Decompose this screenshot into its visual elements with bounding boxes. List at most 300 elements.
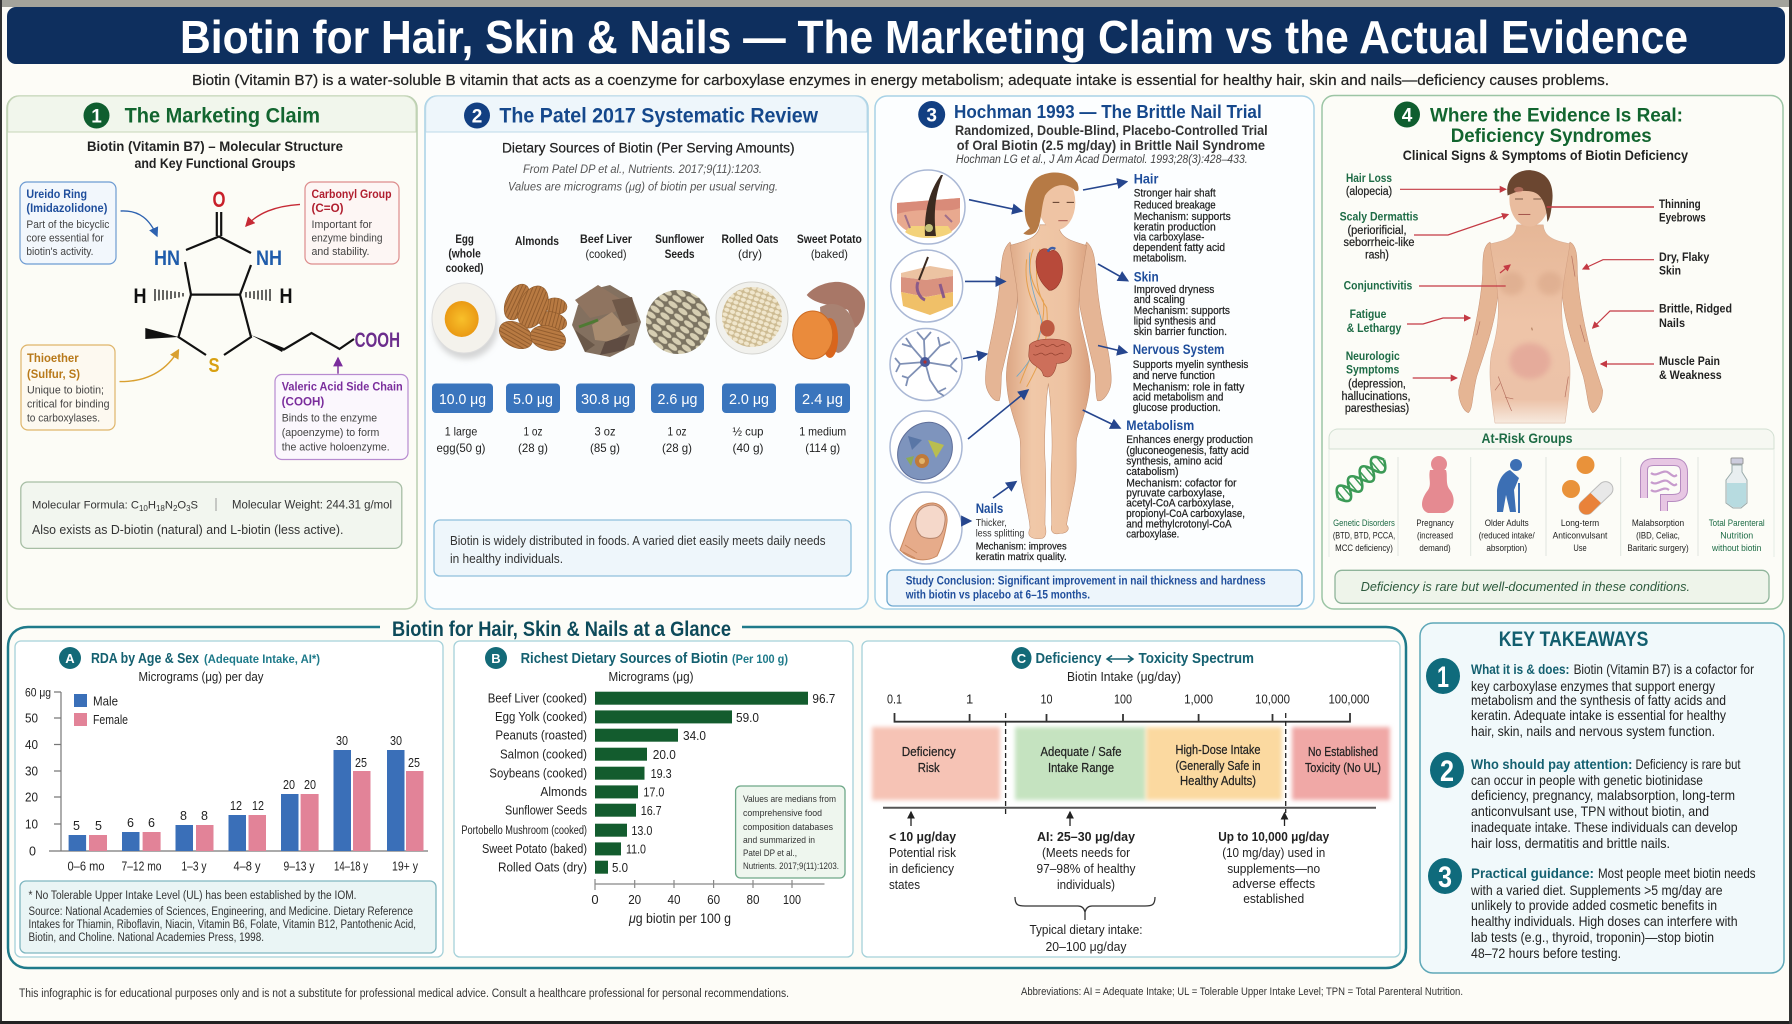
heading: panel A: RDA by Age & Sex: [91, 650, 200, 667]
molecule heading: Biotin (Vitamin B7) – Molecular Structure: [87, 138, 343, 154]
takeaway 1: hair, skin, nails and nervous system function.: [1471, 723, 1715, 739]
molecule: biotin structure: H: [280, 285, 292, 308]
bar chart: RDA by age and sex: 0: [29, 844, 36, 858]
at-risk: total parenteral nutrition bottle: Total Parenteral: [1709, 518, 1765, 528]
bar chart: foods per 100 g: 96.7: [812, 691, 835, 706]
label: adequate intake: (Meets needs for: [1042, 845, 1131, 860]
food column: egg: 10.0 μg: [439, 391, 486, 408]
formula box: S: [191, 500, 198, 512]
study conclusion box: [887, 570, 1302, 606]
study conclusion box: Study Conclusion: Significant improvement in nail thickness and hardness: [906, 576, 1266, 588]
callout: ureido ring: (Imidazolidone): [26, 203, 108, 215]
formula box: 3: [186, 504, 191, 513]
bar chart: RDA by age and sex: 7–12 mo: [122, 860, 162, 874]
food column: sweet potato: (baked): [811, 247, 848, 261]
callout: carbonyl group: Important for: [312, 219, 372, 231]
bar chart: RDA by age and sex: 30: [390, 734, 402, 748]
takeaway 3: Most people meet biotin needs: [1598, 865, 1756, 881]
callouts: left symptom labels: (depression,: [1348, 378, 1406, 390]
text: hair effects: [1133, 170, 1231, 264]
callout: ureido ring: biotin's activity.: [26, 246, 93, 258]
callouts: left symptom labels: [1340, 171, 1419, 415]
at-risk: pregnancy: demand): [1419, 543, 1451, 553]
bar chart: foods per 100 g: 0: [591, 892, 599, 907]
arrow: valeric to chain: [337, 358, 339, 374]
at-risk groups panel: At-Risk Groups: [1482, 431, 1572, 446]
heading: panel 4: Where the Evidence Is Real:: [1430, 104, 1683, 126]
molecule: biotin structure: [134, 187, 400, 377]
label: upper dose: supplements—no: [1227, 861, 1320, 876]
heading: panel C: Deficiency: [1036, 650, 1102, 667]
heading: panel 3: Hochman LG et al., J Am Acad Dermatol. 1993;28(3):428–433.: [956, 154, 1248, 166]
text: metabolism effects: and methylcrotonyl-CoA: [1126, 518, 1232, 530]
text: nails effects: Thicker,: [976, 517, 1007, 529]
formula box: [21, 482, 402, 548]
heading: key takeaways: KEY TAKEAWAYS: [1499, 628, 1648, 651]
takeaway 1: 1: [1437, 661, 1449, 694]
text: metabolism effects: Metabolism: [1126, 418, 1194, 433]
bar chart: foods per 100 g: 40: [668, 892, 680, 907]
panel 2: The Patel 2017 Systematic Review: [425, 96, 868, 609]
text: hair effects: dependent fatty acid: [1133, 242, 1225, 254]
food column: rolled oats: [716, 232, 788, 455]
food column: rolled oats: ½ cup: [732, 424, 764, 438]
label: adequate intake: [1036, 829, 1136, 892]
takeaway 3: Practical guidance:: [1471, 865, 1594, 881]
inset: neuron: [890, 328, 962, 400]
bar chart: foods per 100 g: 20: [628, 892, 641, 907]
callouts: left symptom labels: Conjunctivitis: [1344, 278, 1413, 292]
spectrum band: no toxicity: [1292, 727, 1390, 800]
food column: egg: egg(50 g): [436, 441, 486, 455]
note box: biotin distribution: [434, 520, 851, 576]
spectrum band: high dose: Healthy Adults): [1180, 774, 1256, 788]
leader lines: symptoms to body: [1400, 189, 1654, 378]
footnote box: Biotin, and Choline. National Academies Press, 1998.: [28, 932, 264, 944]
callout: valeric acid side chain: the active holoenzyme.: [282, 442, 390, 454]
food column: sweet potato: [793, 232, 865, 455]
molecule: biotin structure: S: [208, 355, 220, 377]
heading: panel 3: Hochman 1993 — The Brittle Nail Trial: [954, 102, 1262, 122]
bar chart: RDA by age and sex: 14–18 y: [334, 860, 369, 874]
food column: egg: Egg: [455, 232, 474, 246]
bar chart: RDA by age and sex: 6: [127, 816, 134, 830]
text: metabolism effects: [1126, 418, 1253, 541]
arrow: thioether to ring: [120, 350, 178, 382]
callouts: left symptom labels: rash): [1365, 250, 1389, 262]
note box: biotin distribution: in healthy individuals.: [450, 552, 563, 566]
takeaway 2: anticonvulsant use, TPN without biotin, and: [1471, 803, 1709, 819]
callouts: left symptom labels: Hair Loss: [1346, 171, 1392, 185]
callout: thioether: (Sulfur, S): [27, 369, 80, 381]
label: upper dose: Up to 10,000 μg/day: [1218, 829, 1330, 844]
label: upper dose: established: [1243, 891, 1304, 906]
spectrum scale: 1,000: [1184, 692, 1213, 706]
bar chart: RDA by age and sex: 6: [148, 816, 155, 830]
takeaway 1: key carboxylase enzymes that support energy: [1471, 678, 1715, 694]
molecule: biotin structure: H: [134, 285, 146, 308]
bar chart: RDA by age and sex: 19+ y: [392, 860, 419, 874]
takeaway 1: keratin. Adequate intake is essential for healthy: [1471, 707, 1726, 723]
callout: ureido ring: Ureido Ring: [26, 189, 87, 201]
note box: biotin distribution: Biotin is widely distributed in foods. A varied diet easily meets daily needs: [450, 534, 826, 548]
bar chart: foods per 100 g: 11.0: [626, 842, 646, 856]
spectrum scale: 0.1: [887, 692, 902, 706]
food column: sweet potato: 2.4 μg: [802, 391, 843, 408]
callouts: right symptom labels: Brittle, Ridged: [1659, 302, 1732, 316]
bar chart: foods per 100 g: 59.0: [736, 710, 759, 725]
callouts: right symptom labels: Nails: [1659, 316, 1685, 330]
section frame: at a glance: Biotin for Hair, Skin & Nails at a Glance: [392, 618, 731, 641]
spectrum scale: [887, 692, 1370, 722]
text: nails effects: Nails: [976, 501, 1003, 516]
takeaway 3: lab tests (e.g., thyroid, troponin)—stop biotin: [1471, 929, 1714, 945]
footnote box: [20, 881, 436, 953]
molecule: biotin structure: O: [212, 187, 226, 212]
title banner: Biotin for Hair, Skin & Nails — The Marketing Claim vs the Actual Evidence: [180, 11, 1688, 63]
bar chart: foods per 100 g: Egg Yolk (cooked): [495, 709, 587, 724]
study conclusion box: with biotin vs placebo at 6–15 months.: [905, 589, 1090, 601]
text: skin effects: and scaling: [1134, 294, 1185, 306]
note box: medians: Values are medians from: [743, 794, 836, 805]
molecule heading: [87, 138, 343, 171]
takeaway 2: 2: [1440, 755, 1454, 788]
label: adequate intake: individuals): [1057, 877, 1115, 892]
axis subtitle: Micrograms (μg): [608, 669, 694, 684]
food column: beef liver: [572, 232, 641, 455]
food column: beef liver: 30.8 μg: [581, 391, 630, 408]
spectrum band: deficiency risk: Deficiency: [902, 745, 956, 759]
note box: medians: Nutrients. 2017;9(11):1203.: [743, 861, 839, 871]
food chart heading: [502, 141, 795, 194]
bar chart: RDA by age and sex: 1–3 y: [182, 860, 207, 874]
label: adequate intake: 97–98% of healthy: [1036, 861, 1136, 876]
food column: sunflower seeds: [646, 232, 710, 455]
spectrum dividers and arrows: [883, 713, 1376, 826]
bar chart: RDA by age and sex: 9–13 y: [284, 860, 315, 874]
callout: thioether: critical for binding: [27, 398, 110, 410]
callout: valeric acid side chain: Binds to the enzyme: [282, 412, 377, 424]
bar chart: RDA by age and sex: 25: [355, 756, 367, 770]
bar chart: RDA by age and sex: 8: [201, 809, 208, 823]
heading: panel 4: Deficiency Syndromes: [1451, 125, 1652, 147]
text: hair effects: keratin production: [1134, 221, 1216, 233]
takeaway 3: 3: [1438, 861, 1452, 894]
heading: panel 3: of Oral Biotin (2.5 mg/day) in Brittle Nail Syndrome: [957, 138, 1265, 153]
takeaway 1: [1426, 658, 1754, 739]
at-risk: malabsorption intestine: [1627, 462, 1689, 553]
note box: medians: composition databases: [743, 822, 833, 833]
bar chart: foods per 100 g: 20.0: [653, 747, 676, 762]
footer: disclaimer: This infographic is for educational purposes only and is not a substitute for professional medical advice. Consult a healthcare professional for personal recommendations.: [19, 988, 789, 1000]
at-risk: genetic disorders: Genetic Disorders: [1333, 518, 1395, 528]
text: nails effects: [976, 501, 1067, 563]
arrows: insets and callouts to body: [963, 182, 1128, 521]
callout: carbonyl group: (C=O): [312, 203, 344, 215]
at-risk: total parenteral nutrition bottle: Nutrition: [1720, 531, 1753, 541]
bar chart: RDA by age and sex: 25: [408, 756, 420, 770]
text: metabolism effects: Enhances energy production: [1126, 434, 1253, 446]
bar chart: RDA by age and sex: 5: [95, 819, 102, 833]
spectrum scale: 100: [1114, 692, 1132, 706]
note box: deficiency rare: Deficiency is rare but well-documented in these conditions.: [1361, 579, 1690, 594]
callout: ureido ring: Part of the bicyclic: [26, 219, 110, 231]
formula box: Molecular Weight: 244.31 g/mol: [232, 498, 392, 512]
molecule: biotin structure: NH: [256, 247, 282, 270]
bar chart: foods per 100 g: 34.0: [683, 728, 706, 743]
food column: rolled oats: (dry): [738, 247, 762, 261]
takeaway 2: inadequate intake. These individuals can develop: [1471, 819, 1738, 835]
callouts: left symptom labels: Symptoms: [1346, 363, 1400, 377]
takeaway 2: Who should pay attention:: [1471, 756, 1632, 772]
subtitle: Biotin (Vitamin B7) is a water-soluble B vitamin that acts as a coenzyme for carboxylase enzymes in energy metabolism; adequate intake is essential for healthy hair, skin and nails—deficiency causes problems.: [192, 72, 1609, 89]
text: metabolism effects: pyruvate carboxylase,: [1126, 488, 1225, 500]
heading: panel 4: Clinical Signs & Symptoms of Biotin Deficiency: [1403, 148, 1688, 163]
callout: ureido ring: core essential for: [26, 232, 104, 244]
bar chart: foods per 100 g: Salmon (cooked): [500, 746, 587, 762]
callout: thioether: Thioether: [27, 353, 79, 365]
label: deficiency threshold: [889, 829, 957, 892]
food column: sunflower seeds: Seeds: [665, 247, 695, 261]
axis subtitle: Biotin Intake (μg/day): [1067, 669, 1181, 684]
at-risk: older adults: absorption): [1486, 543, 1527, 553]
at-risk: anticonvulsant pills: Anticonvulsant: [1553, 531, 1608, 541]
bar chart: foods per 100 g: Peanuts (roasted): [495, 728, 587, 742]
text: skin effects: lipid synthesis and: [1134, 316, 1216, 328]
food column: rolled oats: Rolled Oats: [722, 232, 779, 246]
bar chart: foods per 100 g: μg biotin per 100 g: [628, 911, 731, 926]
takeaway 2: [1430, 752, 1741, 851]
bar chart: foods per 100 g: 13.0: [631, 823, 652, 838]
text: metabolism effects: carboxylase.: [1126, 529, 1179, 541]
callout: carbonyl group: Carbonyl Group: [312, 189, 392, 201]
text: nails effects: less splitting: [976, 528, 1025, 540]
text: skin effects: [1134, 269, 1230, 338]
callouts: right symptom labels: Eyebrows: [1659, 211, 1706, 225]
takeaway 1: Biotin (Vitamin B7) is a cofactor for: [1574, 661, 1754, 677]
bar chart: RDA by age and sex: 60 μg: [25, 686, 51, 700]
footnote box: * No Tolerable Upper Intake Level (UL) has been established by the IOM.: [28, 890, 356, 902]
bar chart: foods per 100 g: 16.7: [641, 803, 662, 818]
text: hair effects: Hair: [1134, 170, 1159, 186]
heading: panel A: [59, 647, 320, 669]
text: skin effects: Skin: [1134, 269, 1159, 285]
molecule heading: and Key Functional Groups: [134, 155, 296, 171]
at-risk: older adults: Older Adults: [1485, 518, 1529, 528]
takeaway 3: with a varied diet. Supplements >5 mg/day are: [1470, 882, 1723, 898]
text: nervous system effects: Mechanism: role in fatty: [1133, 381, 1245, 393]
heading: panel 4: [1394, 102, 1688, 163]
text: metabolism effects: acetyl-CoA carboxylase,: [1126, 498, 1234, 510]
panel 3: Hochman 1993 brittle nail trial: [875, 96, 1314, 609]
callout: thioether: to carboxylases.: [27, 412, 100, 424]
text: metabolism effects: (gluconeogenesis, fatty acid: [1126, 445, 1249, 457]
bar chart: RDA by age and sex: 10: [25, 818, 38, 832]
callout: ureido ring: [20, 182, 116, 264]
bar chart: foods per 100 g: Sunflower Seeds: [505, 802, 587, 818]
bar chart: foods per 100 g: Almonds: [540, 784, 587, 799]
label: deficiency threshold: Potential risk: [889, 845, 956, 860]
food column: sweet potato: Sweet Potato: [797, 232, 862, 246]
bar chart: foods per 100 g: [461, 690, 835, 926]
callout: carbonyl group: and stability.: [312, 246, 370, 258]
heading: panel A: A: [65, 651, 75, 666]
brace: typical dietary intake: [1015, 897, 1155, 954]
food column: almonds: 5.0 μg: [513, 391, 553, 408]
callout: thioether: Unique to biotin;: [27, 384, 104, 396]
note box: deficiency rare: [1335, 570, 1769, 603]
callouts: right symptom labels: Muscle Pain: [1659, 354, 1720, 368]
bar chart: RDA by age and sex: 0–6 mo: [68, 860, 105, 874]
spectrum band: high dose: High-Dose Intake: [1176, 743, 1261, 757]
bar chart: foods per 100 g: Beef Liver (cooked): [488, 690, 587, 706]
takeaway 3: [1428, 858, 1756, 961]
note box: medians: [736, 786, 845, 878]
panel 4: deficiency syndromes: [1322, 96, 1783, 609]
footnote box: Source: National Academies of Sciences, Engineering, and Medicine. Dietary Reference: [28, 906, 413, 918]
text: nervous system effects: glucose production.: [1133, 402, 1221, 414]
inset: fingernail: [890, 492, 962, 564]
bar chart: RDA by age and sex: 30: [25, 764, 38, 778]
heading: panel 2: 2: [472, 106, 482, 128]
label: upper dose: [1218, 829, 1330, 906]
callout: valeric acid side chain: (apoenzyme) to form: [282, 427, 379, 439]
at-risk: pregnancy: [1416, 456, 1454, 553]
food column: beef liver: 3 oz: [594, 424, 616, 438]
spectrum band: deficiency risk: Risk: [918, 761, 940, 775]
takeaway 3: unlikely to provide added cosmetic benefits in: [1471, 897, 1717, 913]
food column: sweet potato: (114 g): [805, 441, 840, 455]
heading: panel 3: [918, 101, 1268, 166]
footer: abbreviations: Abbreviations: AI = Adequate Intake; UL = Tolerable Upper Intake Level; TPN = Total Parenteral Nutrition.: [1021, 986, 1463, 998]
bar chart: RDA by age and sex: 20: [25, 790, 38, 804]
heading: panel C: Toxicity Spectrum: [1138, 650, 1254, 667]
takeaway 2: can occur in people with genetic biotinidase: [1471, 772, 1703, 788]
food column: beef liver: (cooked): [586, 247, 627, 261]
inset: skin layers: [891, 250, 963, 322]
bar chart: foods per 100 g: Portobello Mushroom (cooked): [461, 825, 587, 837]
at-risk: pregnancy: Pregnancy: [1416, 518, 1454, 528]
arrow: ureido to ring: [121, 211, 157, 236]
food column: sunflower seeds: 2.6 μg: [658, 391, 698, 408]
illustration: body with deficiency signs: [1459, 170, 1603, 423]
spectrum band: high dose: (Generally Safe in: [1176, 759, 1261, 773]
formula box: Molecular Formula: C: [32, 500, 139, 512]
panel C: deficiency to toxicity spectrum: [862, 641, 1400, 957]
panel B: richest dietary sources: [454, 641, 853, 957]
illustration: body with organs: [985, 173, 1111, 539]
food column: sunflower seeds: 1 oz: [668, 424, 686, 438]
callout: valeric acid side chain: [275, 374, 408, 460]
callouts: left symptom labels: hallucinations,: [1342, 391, 1410, 403]
axis subtitle: Micrograms (μg) per day: [138, 669, 264, 684]
panel: key takeaways: [1420, 623, 1784, 973]
label: deficiency threshold: states: [889, 877, 920, 892]
heading: panel C: C: [1017, 651, 1027, 666]
callout: thioether: [21, 345, 115, 430]
text: nervous system effects: Nervous System: [1133, 342, 1224, 357]
spectrum band: no toxicity: No Established: [1308, 745, 1378, 759]
at-risk: total parenteral nutrition bottle: [1709, 458, 1765, 553]
callout: valeric acid side chain: (COOH): [282, 397, 324, 409]
text: metabolism effects: catabolism): [1126, 466, 1179, 478]
spectrum band: high dose: [1146, 727, 1282, 800]
text: hair effects: Mechanism: supports: [1134, 211, 1231, 223]
bar chart: RDA by age and sex: 8: [180, 809, 187, 823]
bar chart: foods per 100 g: 60: [707, 892, 720, 907]
formula box: 18: [156, 504, 165, 513]
callouts: left symptom labels: (alopecia): [1346, 186, 1392, 198]
at-risk: genetic disorders: (BTD, BTD, PCCA,: [1333, 531, 1395, 541]
formula box: N: [165, 500, 173, 512]
callouts: right symptom labels: Thinning: [1659, 197, 1701, 211]
food column: almonds: 1 oz: [524, 424, 542, 438]
bar chart: foods per 100 g: 17.0: [643, 784, 664, 800]
text: nervous system effects: [1133, 342, 1249, 414]
callouts: left symptom labels: paresthesias): [1345, 403, 1409, 415]
legend: Female: [93, 712, 128, 727]
at-risk: malabsorption intestine: Malabsorption: [1632, 518, 1684, 528]
at-risk groups panel: [1329, 429, 1774, 557]
text: hair effects: via carboxylase-: [1134, 232, 1205, 244]
text: skin effects: Improved dryness: [1134, 284, 1215, 296]
at-risk: genetic disorders: [1332, 453, 1395, 553]
legend: [74, 694, 128, 727]
takeaway 1: metabolism and the synthesis of fatty acids and: [1471, 692, 1726, 708]
food column: beef liver: Beef Liver: [580, 232, 632, 246]
callouts: right symptom labels: Dry, Flaky: [1659, 250, 1710, 264]
at-risk: anticonvulsant pills: Use: [1573, 543, 1587, 553]
heading: panel 4: 4: [1402, 106, 1413, 126]
food chart heading: Dietary Sources of Biotin (Per Serving Amounts): [502, 141, 795, 156]
bar chart: RDA by age and sex: 30: [336, 734, 348, 748]
label: upper dose: adverse effects: [1232, 876, 1316, 891]
heading: panel B: B: [491, 651, 501, 666]
food column: egg: cooked): [446, 261, 484, 275]
callouts: right symptom labels: & Weakness: [1659, 368, 1722, 382]
callouts: left symptom labels: seborrheic-like: [1344, 237, 1414, 249]
bar chart: RDA by age and sex: 20: [304, 778, 316, 792]
arrow: carbonyl to oxygen: [246, 204, 300, 226]
bar chart: foods per 100 g: 100: [783, 892, 801, 907]
callouts: left symptom labels: Scaly Dermattis: [1340, 210, 1419, 224]
spectrum band: adequate: [1015, 727, 1146, 800]
food column: sweet potato: 1 medium: [799, 424, 846, 438]
food column: egg: [432, 232, 498, 455]
text: nervous system effects: and nerve function: [1133, 370, 1215, 382]
callouts: right symptom labels: Skin: [1659, 264, 1681, 278]
text: hair effects: Stronger hair shaft: [1134, 188, 1216, 200]
panel A: RDA chart: [15, 641, 443, 957]
note box: medians: Patel DP et al.,: [743, 848, 797, 859]
takeaway 3: healthy individuals. High doses can interfere with: [1471, 913, 1738, 929]
heading: panel 3: Randomized, Double-Blind, Placebo-Controlled Trial: [955, 123, 1268, 138]
spectrum scale: 10,000: [1255, 692, 1290, 706]
at-risk: total parenteral nutrition bottle: without biotin: [1711, 543, 1761, 553]
heading: panel B: (Per 100 g): [732, 652, 788, 666]
brace: typical dietary intake: 20–100 μg/day: [1046, 939, 1127, 954]
text: hair effects: metabolism.: [1133, 252, 1187, 264]
food chart heading: From Patel DP et al., Nutrients. 2017;9(11):1203.: [523, 164, 762, 176]
text: skin effects: skin barrier function.: [1134, 326, 1227, 338]
spectrum band: adequate: Adequate / Safe: [1040, 745, 1122, 759]
heading: panel B: Richest Dietary Sources of Biotin: [521, 650, 728, 667]
bar chart: RDA by age and sex: 12: [230, 799, 242, 813]
callouts: left symptom labels: (periorificial,: [1348, 225, 1406, 237]
heading: panel 2: The Patel 2017 Systematic Review: [499, 104, 819, 128]
footnote box: Intakes for Thiamin, Riboflavin, Niacin, Vitamin B6, Folate, Vitamin B12, Pantothenic Acid,: [28, 919, 416, 931]
callouts: left symptom labels: Neurologic: [1346, 349, 1400, 363]
